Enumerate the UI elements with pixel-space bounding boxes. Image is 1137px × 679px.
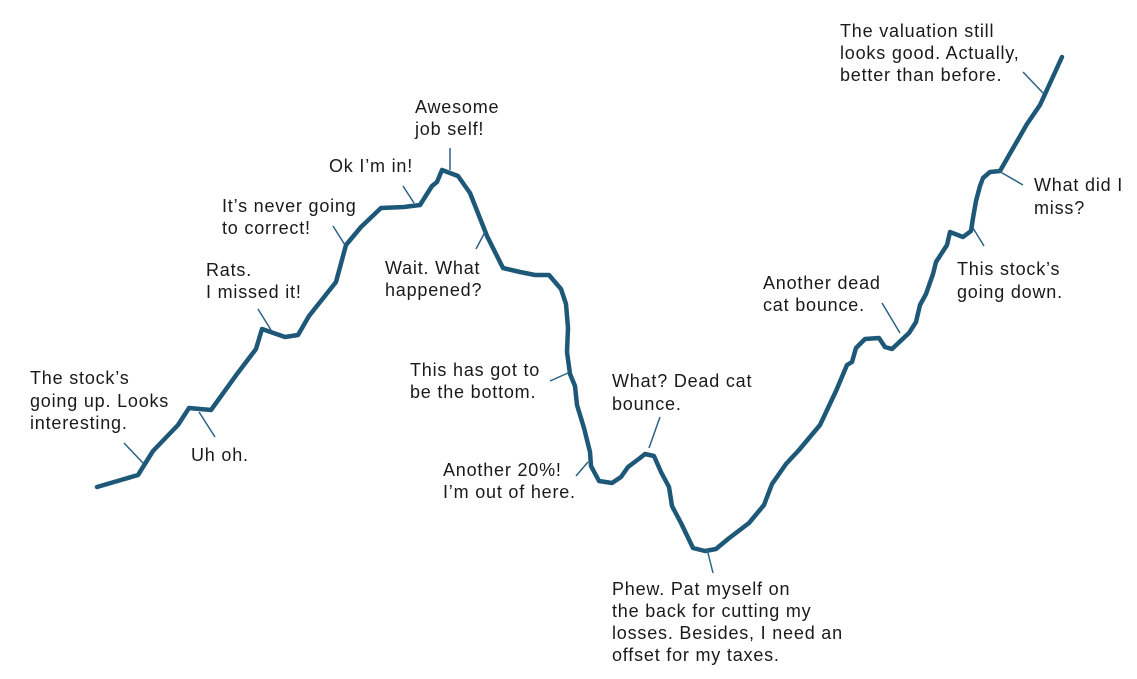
label: valuation: better than before. [840, 65, 1002, 85]
label: awesome: Awesome [415, 97, 499, 117]
label: rats: Rats. [206, 260, 252, 280]
label: wait: happened? [385, 280, 482, 300]
label: phew: the back for cutting my [612, 601, 811, 621]
label: never correct: to correct! [222, 218, 311, 238]
label: never correct: It’s never going [222, 196, 357, 216]
label: phew: losses. Besides, I need an [612, 623, 843, 643]
label: another 20%: Another 20%! [443, 460, 562, 480]
label: wait: Wait. What [385, 258, 480, 278]
label: rats: I missed it! [206, 282, 302, 302]
label: phew: offset for my taxes. [612, 645, 780, 665]
label: stock going up: interesting. [30, 413, 128, 433]
label: bottom: This has got to [410, 360, 540, 380]
label: going down: going down. [957, 282, 1063, 302]
label: stock going up: The stock’s [30, 368, 130, 388]
label: what did I miss: miss? [1034, 198, 1085, 218]
price line [97, 57, 1062, 551]
label: going down: This stock’s [957, 259, 1060, 279]
label: another dead cat: Another dead [763, 273, 881, 293]
label: ok in: Ok I’m in! [329, 156, 413, 176]
leader lines [124, 72, 1043, 573]
label: dead cat bounce: What? Dead cat [612, 371, 752, 391]
label: awesome: job self! [414, 119, 484, 139]
label: stock going up: going up. Looks [30, 391, 169, 411]
label: dead cat bounce: bounce. [612, 394, 682, 414]
label: another 20%: I’m out of here. [443, 482, 576, 502]
label: bottom: be the bottom. [410, 382, 536, 402]
label: another dead cat: cat bounce. [763, 295, 865, 315]
label: valuation: The valuation still [840, 21, 994, 41]
label: phew: Phew. Pat myself on [612, 579, 790, 599]
label: what did I miss: What did I [1034, 175, 1123, 195]
label: valuation: looks good. Actually, [840, 43, 1020, 63]
label: uh oh: Uh oh. [191, 445, 249, 465]
